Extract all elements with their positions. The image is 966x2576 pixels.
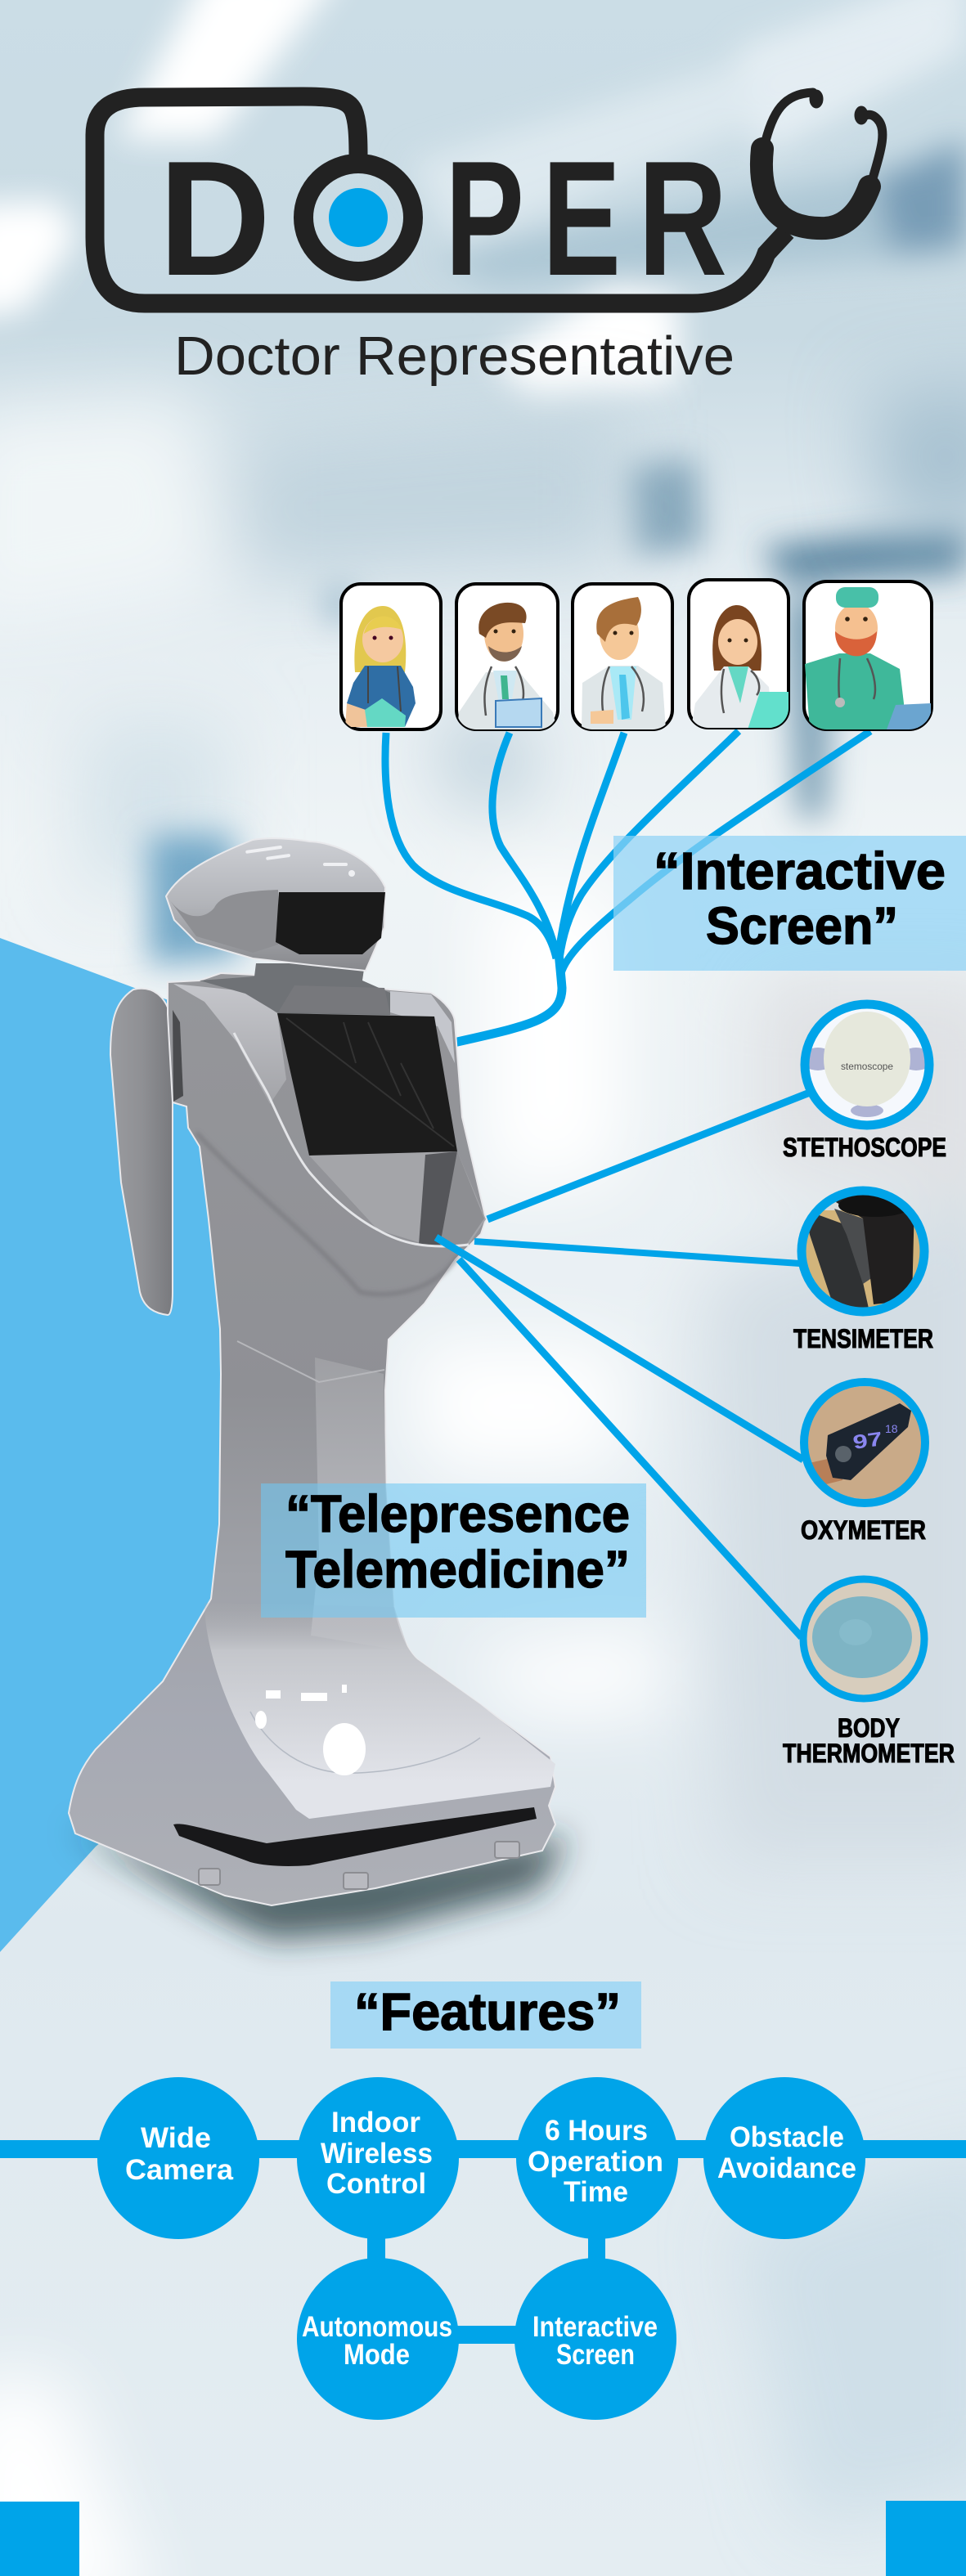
robot chest screen (277, 1013, 457, 1156)
feature: indoor wireless control (297, 2077, 459, 2239)
robot column light facet (311, 1358, 409, 1652)
feature: indoor wireless control: Wireless (321, 2138, 433, 2170)
robot head highlights (245, 846, 355, 877)
feature: obstacle avoidance: Obstacle (730, 2121, 844, 2153)
telepresence telemedicine heading: Telemedicine” (285, 1540, 630, 1599)
robot body and base silhouette (69, 973, 555, 1905)
doctor card 4: female doctor with tablet (689, 580, 790, 729)
corner block left (0, 2502, 79, 2576)
feature: autonomous mode: Autonomous (302, 2311, 452, 2343)
logo letter O as lens (303, 164, 413, 272)
feature: indoor wireless control: Control (326, 2168, 426, 2200)
feature: 6 hours operation time: Operation (528, 2146, 663, 2178)
sensor: tensimeter (793, 1190, 933, 1353)
blue diagonal panel (0, 938, 344, 1952)
robot shoulder light panel (173, 984, 286, 1104)
feature: interactive screen: Interactive (532, 2311, 658, 2343)
feature: autonomous mode (297, 2258, 459, 2420)
robot floor shadow (70, 1828, 568, 1940)
connector lines from doctors to robot screen (385, 731, 870, 1047)
stethoscope (762, 91, 883, 228)
feature: 6 hours operation time (516, 2077, 678, 2239)
robot scoop white edge (234, 1033, 469, 1246)
feature: obstacle avoidance: Avoidance (717, 2152, 856, 2184)
doctor card 1: blonde nurse (341, 584, 441, 729)
robot (69, 838, 568, 1940)
interactive screen heading (613, 836, 966, 971)
doctor card 3: young doctor (573, 584, 672, 729)
robot neck (200, 963, 390, 1015)
robot base reflections (255, 1685, 366, 1775)
logo letter D: D (159, 128, 271, 310)
feature: indoor wireless control: Indoor (331, 2107, 420, 2138)
feature: 6 hours operation time: 6 Hours (545, 2115, 648, 2147)
corner block right (886, 2501, 966, 2576)
telepresence telemedicine heading (261, 1483, 646, 1618)
feature: autonomous mode: Mode (344, 2339, 410, 2371)
interactive screen heading: “Interactive (654, 841, 946, 900)
robot base oval line (250, 1712, 480, 1773)
sensor: oxymeter: 18 (885, 1422, 898, 1435)
robot arm crease (173, 1010, 183, 1102)
robot right shoulder (390, 991, 455, 1063)
robot head face plate (169, 890, 278, 953)
feature: wide camera: Wide (141, 2122, 211, 2154)
robot scoop dark strip (419, 1151, 457, 1247)
logo letters PER: E (542, 128, 621, 310)
robot arm (110, 989, 173, 1315)
telepresence telemedicine heading: “Telepresence (285, 1484, 630, 1543)
sensor: stethoscope (783, 1002, 946, 1162)
feature: obstacle avoidance (703, 2077, 865, 2239)
label: tensimeter: TENSIMETER (793, 1324, 933, 1353)
robot base slot (173, 1807, 537, 1866)
logo: DOPER with stethoscope (95, 91, 883, 387)
logo letters PER (445, 128, 727, 310)
feature: 6 hours operation time: Time (564, 2176, 628, 2208)
features heading: “Features” (354, 1982, 621, 2041)
sensor: stethoscope: stemoscope (841, 1061, 893, 1072)
robot fold lines (196, 1133, 458, 1295)
robot visor (276, 892, 385, 954)
logo letters PER: P (445, 128, 524, 310)
label: body thermometer: BODY (838, 1713, 900, 1743)
features network connectors (0, 2140, 966, 2344)
doctor cards row (341, 580, 932, 729)
feature: wide camera: Camera (125, 2154, 234, 2186)
robot base top plate (204, 1603, 555, 1819)
doctor card 2: bearded doctor (456, 584, 558, 729)
label: body thermometer (783, 1713, 955, 1768)
feature: interactive screen: Screen (556, 2339, 635, 2371)
interactive screen heading: Screen” (706, 896, 898, 955)
connector lines from robot tray to sensors (436, 1093, 810, 1637)
sensor: oxymeter (801, 1382, 932, 1545)
sensor: oxymeter: 97 (851, 1428, 883, 1454)
doctor card 5: surgeon in green scrubs (804, 581, 932, 729)
robot sensor buttons (199, 1842, 519, 1889)
label: oxymeter: OXYMETER (801, 1515, 926, 1545)
logo letters PER: R (638, 128, 727, 310)
feature: interactive screen (514, 2258, 676, 2420)
robot torso scoop lower (309, 1151, 486, 1247)
feature: wide camera (97, 2077, 259, 2239)
sensor: body thermometer (783, 1578, 955, 1768)
logo subtitle: Doctor Representative (174, 325, 735, 387)
robot head (166, 838, 385, 971)
logo outline tube (95, 96, 787, 303)
